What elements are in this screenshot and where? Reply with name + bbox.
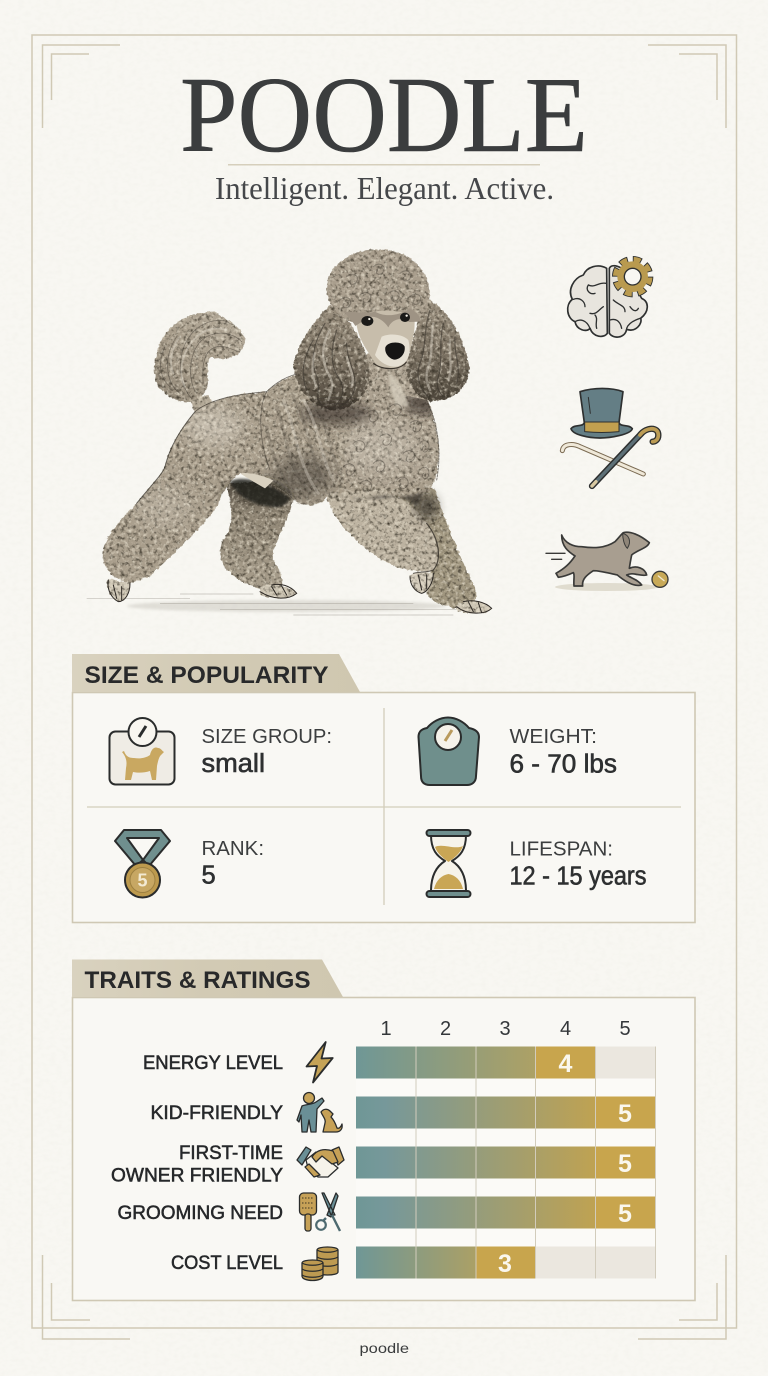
trait labels: GROOMING NEED bbox=[118, 1202, 283, 1224]
stat: lifespan bbox=[426, 830, 646, 897]
icon: medal bbox=[115, 830, 170, 898]
stat: rank: RANK: bbox=[202, 838, 264, 860]
icon: coin stacks bbox=[302, 1247, 338, 1280]
rating bar: first-time owner friendly 5: 5 bbox=[618, 1150, 632, 1178]
icon: brush and scissors bbox=[300, 1193, 340, 1231]
section heading: TRAITS & RATINGS bbox=[84, 967, 310, 994]
stat: size group: SIZE GROUP: bbox=[202, 726, 332, 748]
rib stripes bbox=[267, 397, 340, 493]
rating bar: energy level 4 bbox=[356, 1046, 656, 1078]
far front leg bbox=[400, 483, 476, 608]
icon: lightning bolt bbox=[306, 1042, 333, 1082]
section heading: SIZE & POPULARITY bbox=[84, 662, 328, 689]
trait labels: OWNER FRIENDLY bbox=[111, 1164, 283, 1186]
poodle illustration bbox=[87, 249, 492, 615]
panel frame bbox=[72, 998, 695, 1300]
panel: traits and ratings bbox=[72, 960, 695, 1300]
tail strands bbox=[160, 320, 242, 397]
pom curls bbox=[340, 264, 421, 308]
stat: lifespan: LIFESPAN: bbox=[510, 838, 613, 860]
trait labels: KID-FRIENDLY bbox=[150, 1102, 283, 1124]
stat: weight: 6 - 70 lbs bbox=[510, 750, 617, 778]
footer text: poodle bbox=[360, 1340, 409, 1356]
rating bar: grooming need 5 bbox=[356, 1196, 656, 1228]
rating bar: kid-friendly 5 bbox=[356, 1096, 656, 1128]
nose bbox=[385, 342, 405, 360]
stat: rank bbox=[115, 830, 264, 898]
hat bbox=[571, 388, 632, 438]
dark cane bbox=[592, 429, 658, 486]
left ear bbox=[293, 305, 370, 411]
stat: size group: small bbox=[202, 750, 265, 778]
icon: brain and gear bbox=[568, 260, 649, 337]
rating scale header bbox=[380, 1018, 631, 1040]
speed lines bbox=[546, 553, 565, 559]
panel: size and popularity bbox=[72, 654, 695, 922]
right ear strands bbox=[418, 310, 458, 398]
rating bar: grooming need 5: 5 bbox=[618, 1200, 632, 1228]
icon: running dog with ball bbox=[546, 532, 668, 591]
brain bbox=[568, 266, 647, 337]
paw toes bbox=[108, 573, 492, 613]
left ear strands bbox=[303, 323, 355, 408]
rating bar: cost level 3 bbox=[356, 1246, 656, 1278]
right ear bbox=[407, 298, 469, 402]
face bbox=[343, 308, 421, 369]
neck and chest bbox=[340, 353, 437, 488]
fur strokes bbox=[137, 264, 458, 573]
rating bar: cost level 3: 3 bbox=[498, 1250, 512, 1278]
rating scale header: 1 bbox=[380, 1018, 392, 1040]
rating scale header: 2 bbox=[440, 1018, 451, 1040]
icon: child and dog bbox=[297, 1092, 342, 1132]
icon: weighing scale bbox=[418, 718, 479, 785]
head pom bbox=[327, 249, 430, 323]
stat: weight bbox=[418, 718, 617, 785]
rating chart bbox=[356, 1046, 656, 1278]
shadow behind raised leg bbox=[415, 493, 438, 520]
gear bbox=[616, 260, 649, 293]
trait labels: ENERGY LEVEL bbox=[143, 1052, 283, 1074]
subtitle: Intelligent. Elegant. Active. bbox=[215, 170, 554, 206]
outline bbox=[137, 412, 195, 503]
dog body bbox=[556, 532, 649, 586]
icon: medal: 5 bbox=[137, 870, 148, 890]
section tab bbox=[72, 960, 343, 997]
trait labels bbox=[111, 1052, 283, 1274]
raised front leg bbox=[325, 490, 438, 571]
title rule bbox=[228, 164, 540, 166]
eyes bbox=[361, 316, 373, 326]
far hind leg bbox=[220, 480, 293, 591]
stat: size group bbox=[110, 718, 332, 784]
rating scale header: 4 bbox=[560, 1018, 571, 1040]
icon: top hat and cane bbox=[562, 388, 658, 486]
tail bbox=[154, 312, 245, 402]
icon: handshake bbox=[297, 1147, 344, 1177]
trait labels: COST LEVEL bbox=[171, 1252, 283, 1274]
rating scale header: 3 bbox=[499, 1018, 511, 1040]
rating bar: energy level 4: 4 bbox=[559, 1050, 573, 1078]
shading bbox=[133, 392, 443, 527]
stat: weight: WEIGHT: bbox=[510, 726, 597, 748]
icon: hourglass bbox=[426, 830, 470, 897]
body and hind leg bbox=[103, 373, 439, 583]
trait labels: FIRST-TIME bbox=[179, 1142, 283, 1164]
panel frame bbox=[72, 692, 695, 922]
stat: lifespan: 12 - 15 years bbox=[510, 862, 646, 890]
ground shadow bbox=[87, 594, 457, 615]
stat: rank: 5 bbox=[202, 862, 216, 890]
icon: size dial and dog bbox=[110, 718, 174, 784]
rating bar: kid-friendly 5: 5 bbox=[618, 1100, 632, 1128]
chest curls bbox=[343, 404, 429, 492]
dog figure bbox=[103, 249, 492, 614]
rating scale header: 5 bbox=[619, 1018, 631, 1040]
shadow bbox=[555, 583, 658, 591]
rear paw bbox=[107, 578, 130, 601]
ball bbox=[652, 571, 668, 587]
title: POODLE bbox=[180, 56, 588, 175]
neck light strip bbox=[388, 372, 408, 407]
leg gap shadow bbox=[230, 479, 290, 507]
rating bar: first-time owner friendly 5 bbox=[356, 1146, 656, 1178]
cream cane bbox=[562, 445, 643, 474]
section tab bbox=[72, 654, 360, 692]
